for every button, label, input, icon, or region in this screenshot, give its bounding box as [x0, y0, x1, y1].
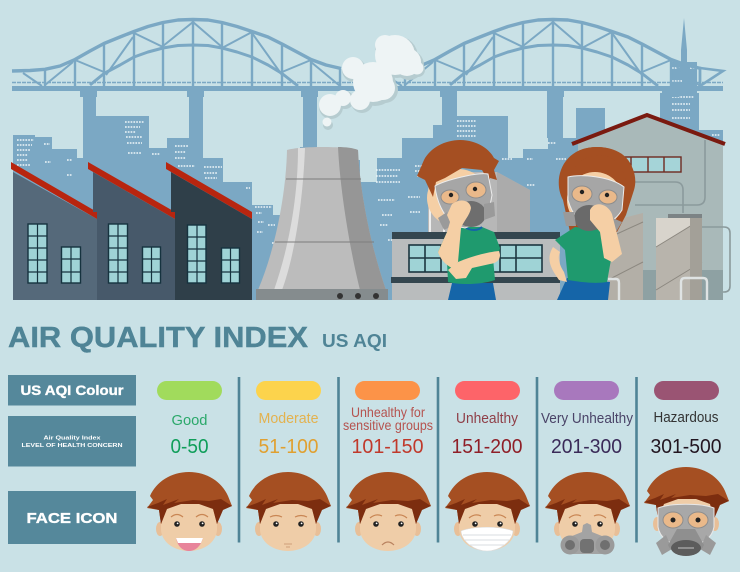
- column: unhealthy: 151-200: [452, 436, 522, 458]
- face: frowning: [346, 472, 431, 551]
- column: unhealthy for sensitive groups: [343, 381, 433, 551]
- smoke plume: [319, 35, 425, 130]
- skyline and bridge piers: [13, 18, 723, 300]
- column: very unhealthy: 201-300: [551, 436, 622, 458]
- row label: US AQI colour: [8, 375, 136, 406]
- column: hazardous: Hazardous: [654, 409, 718, 426]
- column: moderate: [246, 381, 331, 551]
- factory building 2: [88, 162, 175, 300]
- column: moderate: 51-100: [258, 436, 318, 458]
- column: very unhealthy: Very Unhealthy: [541, 410, 633, 427]
- skyline windows: [17, 68, 720, 243]
- face: half respirator: [545, 472, 630, 554]
- column: unhealthy for sensitive groups: sensitive groups: [343, 417, 433, 433]
- column: moderate: Moderate: [258, 410, 318, 427]
- factory building 1: [11, 162, 97, 300]
- column: unhealthy: Unhealthy: [456, 410, 518, 427]
- girl wearing gas mask: [549, 147, 635, 300]
- factory building 3: [166, 162, 252, 300]
- column: hazardous: 301-500: [650, 436, 722, 458]
- face: smiling: [147, 472, 232, 551]
- subtitle: US AQI: [322, 331, 387, 351]
- column: good: [147, 381, 232, 551]
- column dividers: [239, 377, 636, 542]
- bridge right: [372, 20, 723, 97]
- row label: level of health concern: [8, 416, 136, 466]
- cooling tower: [256, 147, 388, 300]
- factory behind the boy: [391, 172, 560, 300]
- row label: level of health concern: LEVEL OF HEALTH CONCERN: [22, 443, 122, 449]
- face: surgical mask: [445, 472, 530, 551]
- column: unhealthy for sensitive groups: Unhealthy for: [351, 404, 425, 420]
- column: unhealthy for sensitive groups: 101-150: [352, 436, 424, 458]
- bridge left: [12, 20, 723, 97]
- face: neutral: [246, 472, 331, 551]
- main title: AIR QUALITY INDEX: [8, 322, 309, 354]
- row label: face icon: FACE ICON: [26, 510, 118, 527]
- column: unhealthy: [445, 381, 530, 551]
- boy wearing gas mask: [417, 140, 500, 300]
- column: hazardous: [644, 381, 729, 556]
- face: full gas mask: [644, 467, 729, 556]
- column: good: 0-50: [170, 436, 208, 458]
- row label: level of health concern: Air Quality Index: [44, 436, 101, 442]
- row label: US AQI colour: US AQI Colour: [20, 383, 124, 398]
- factory with red roof: [572, 115, 730, 300]
- column: good: Good: [172, 412, 208, 429]
- row label: face icon: [8, 491, 136, 544]
- column: very unhealthy: [541, 381, 633, 554]
